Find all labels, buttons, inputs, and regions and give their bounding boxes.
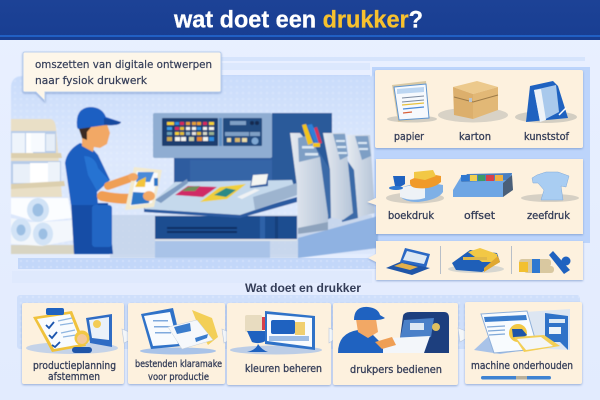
icon: operator at console — [338, 307, 449, 353]
header bar — [0, 0, 600, 40]
icon: colour monitor — [230, 311, 322, 354]
press units — [290, 133, 375, 234]
icon: rolls — [519, 251, 570, 274]
labels: techniques: boekdruk — [388, 210, 435, 222]
icon: cardboard box — [438, 81, 508, 122]
text — [33, 360, 116, 383]
icon: letterpress stack — [386, 170, 444, 204]
text: machine onderhouden — [471, 360, 573, 372]
cap — [77, 107, 121, 129]
bubble text: omszetten van digitale ontwerpen — [35, 58, 212, 71]
progress bar — [481, 376, 551, 380]
text: drukpers bedienen — [350, 364, 442, 376]
icon: plastic — [515, 81, 577, 123]
panel: print products — [368, 241, 583, 280]
icon: clipboard — [26, 308, 118, 354]
text: afstemmen — [48, 371, 100, 383]
panel: materials — [375, 70, 583, 148]
paper rolls — [11, 198, 74, 246]
card: machine onderhouden — [465, 302, 582, 384]
text: productieplanning — [33, 360, 116, 372]
icon: documents — [140, 308, 218, 354]
bubble text: naar fysiok drukwerk — [35, 74, 148, 87]
printing press — [144, 113, 375, 239]
head — [82, 124, 110, 152]
brochure — [125, 167, 162, 210]
labels: materials: karton — [459, 131, 491, 143]
trousers — [71, 203, 113, 254]
ink bottles on press — [302, 124, 322, 147]
card: drukpers bedienen — [333, 303, 458, 385]
title: wat doet een drukker? — [173, 6, 423, 34]
labels: materials: papier — [394, 131, 425, 143]
arrow — [222, 329, 238, 343]
control panel — [153, 113, 332, 187]
shelf with paper — [11, 119, 65, 197]
speech bubble — [23, 52, 221, 101]
labels: techniques: zeefdruk — [527, 210, 571, 222]
panel: print techniques — [367, 159, 583, 234]
icon: t-shirt — [521, 172, 579, 202]
card: kleuren beheren — [227, 303, 331, 385]
text — [135, 359, 222, 383]
icon: manuals — [474, 309, 570, 354]
worker — [65, 107, 162, 254]
arrow — [122, 329, 139, 343]
card: bestanden klaarmaken — [128, 303, 225, 384]
icon: desktop printer — [448, 248, 504, 273]
labels: materials: kunststof — [524, 131, 569, 143]
background bands — [12, 57, 590, 349]
floor — [11, 215, 378, 258]
labels: techniques: offset — [464, 210, 495, 222]
bubble text — [35, 58, 212, 87]
text: kleuren beheren — [245, 363, 322, 375]
section heading: Wat doet en drukker — [245, 281, 361, 295]
scene: printer at work — [11, 76, 378, 258]
labels: techniques — [388, 210, 571, 222]
labels: materials — [394, 131, 569, 143]
arrow — [329, 328, 343, 343]
icon: laptop — [386, 248, 430, 275]
arms — [102, 177, 150, 199]
text: bestenden klaramake — [135, 359, 222, 370]
feed table — [144, 173, 297, 239]
arrow — [458, 328, 474, 342]
shirt — [65, 143, 110, 205]
card: productieplanning afstemmen — [22, 303, 124, 384]
icon: paper — [387, 81, 437, 122]
icon: offset plate — [453, 173, 513, 197]
text: voor productie — [148, 372, 209, 383]
